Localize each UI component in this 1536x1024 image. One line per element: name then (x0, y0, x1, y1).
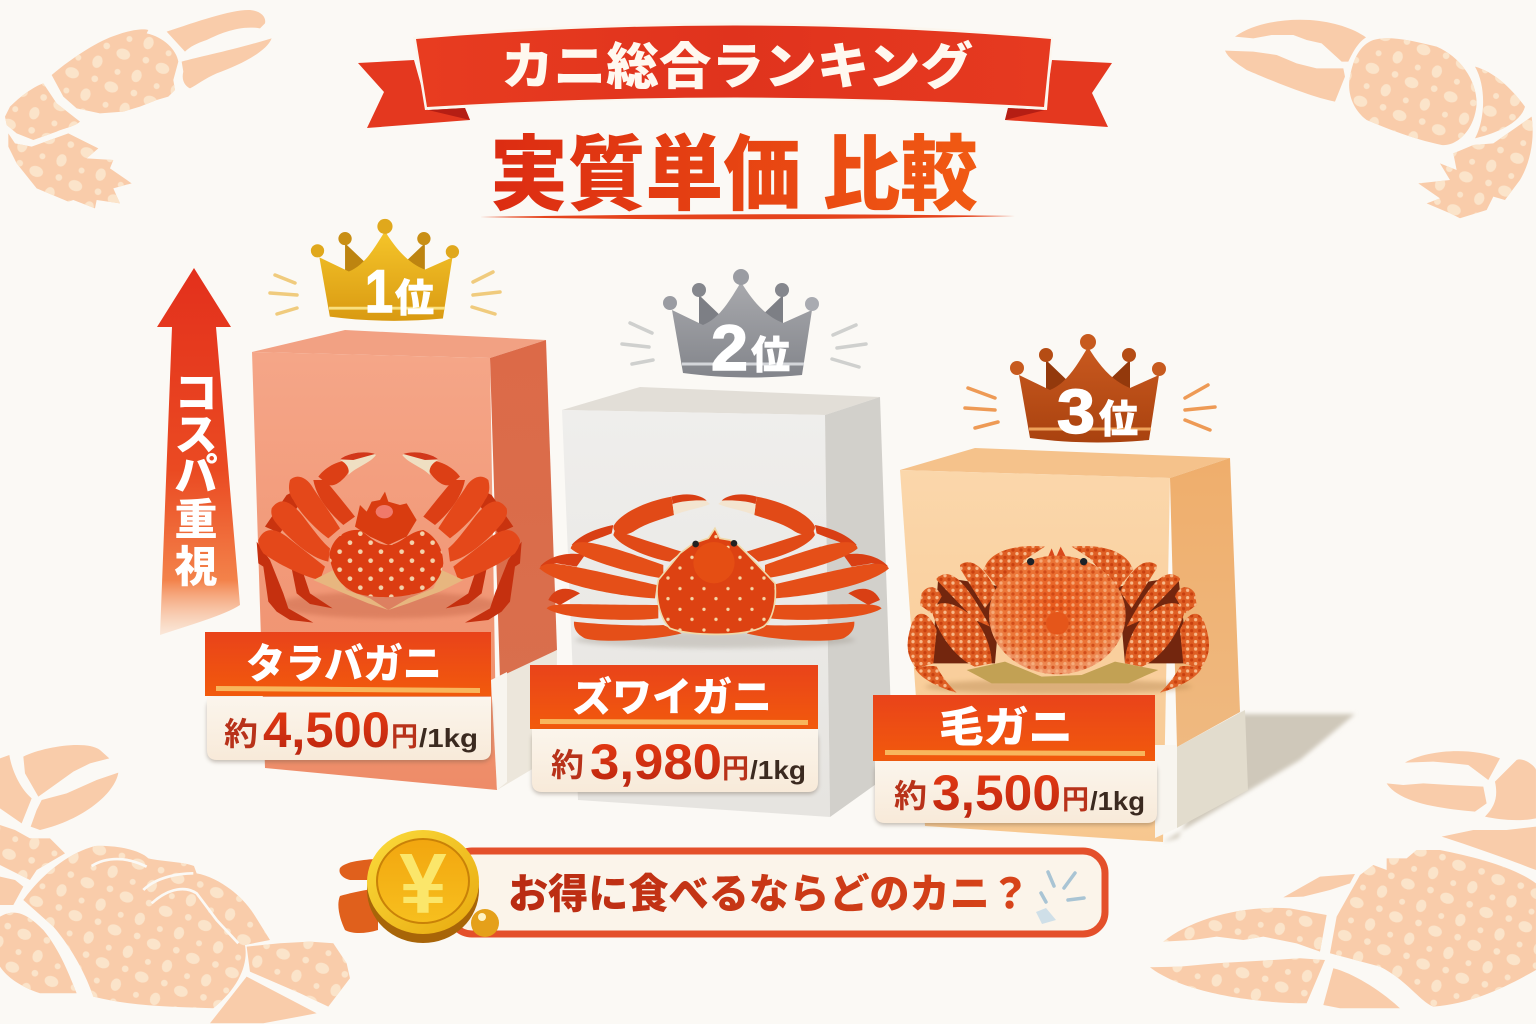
decoration: crab claw top left (5, 10, 272, 208)
arrow vertical text: 視 (174, 544, 218, 592)
rank label 3: 3 (1057, 378, 1095, 447)
name plate 2: ズワイガニ (572, 675, 772, 720)
crown: silver 2nd: 位 (751, 335, 790, 378)
crown: gold 1st: 位 (395, 278, 434, 321)
name plate 1: タラバガニ (246, 641, 442, 687)
ribbon right tail (1005, 60, 1112, 127)
price 3 (875, 761, 1157, 825)
price 2 (532, 729, 818, 794)
yen glyph: ¥ (399, 837, 447, 932)
arrow: cost performance (157, 268, 240, 635)
snow crab body (657, 528, 775, 634)
crab: snow crab (539, 494, 889, 648)
ribbon left tail (358, 60, 470, 128)
price 3: 円 (1062, 785, 1089, 815)
title ribbon (358, 22, 1112, 128)
hair crab legs (908, 546, 1209, 693)
crown: gold 1st (311, 219, 459, 325)
question banner (450, 851, 1105, 934)
price 1: 約 (224, 716, 258, 752)
king crab right legs (402, 452, 522, 623)
price 3: 3,500 (932, 765, 1061, 821)
price 2: /1kg (750, 755, 806, 785)
banner frame (450, 851, 1105, 934)
ribbon heading: カニ総合ランキング (501, 39, 973, 95)
subtitle: 実質単価 比較 (490, 130, 978, 221)
crown: silver 2nd (663, 269, 819, 384)
coin ribbon (338, 859, 378, 933)
price 1: /1kg (419, 723, 478, 753)
question text: お得に食べるならどのカニ？ (508, 871, 1030, 917)
king crab left legs (257, 452, 376, 623)
decoration: crab claw bottom left (0, 745, 350, 1023)
podium 3 (900, 448, 1248, 842)
name plate 3: 毛ガニ (939, 704, 1073, 751)
ribbon band (413, 22, 1053, 110)
price 1: 円 (391, 722, 418, 752)
label card 1: タラバガニ (205, 632, 491, 762)
sparks: bronze crown (965, 385, 1215, 430)
sparks: silver crown (622, 323, 866, 367)
king crab body (313, 492, 463, 610)
arrow vertical text (174, 370, 218, 592)
podium 3 shadow (1163, 714, 1355, 842)
crab: king crab (257, 452, 522, 623)
price 3: /1kg (1090, 786, 1145, 816)
crab: hair crab (908, 546, 1209, 694)
price 3: 約 (894, 778, 927, 814)
price 2: 3,980 (590, 734, 722, 790)
price 2: 約 (551, 747, 584, 783)
arrow vertical text: コ (174, 370, 218, 418)
crown: bronze 3rd (1010, 334, 1166, 447)
price 1: 4,500 (263, 702, 390, 758)
price 1 (207, 697, 491, 762)
arrow vertical text: パ (174, 452, 218, 500)
label card 2: ズワイガニ (530, 665, 818, 794)
name plate 3 (873, 695, 1155, 761)
sparkle marks (1036, 872, 1084, 924)
label card 3: 毛ガニ (873, 695, 1157, 825)
snow crab left legs (539, 494, 710, 641)
decoration: crab claw top right (1225, 20, 1533, 218)
decoration: crab claw bottom right (1150, 751, 1536, 1008)
sparks: gold crown (270, 272, 500, 314)
name plate 1 (205, 632, 491, 696)
icon: yen coin (338, 830, 499, 943)
price 2: 円 (722, 754, 749, 784)
hair crab body (967, 547, 1158, 683)
snow crab right legs (718, 494, 889, 641)
arrow vertical text: ス (174, 412, 218, 460)
crown: bronze 3rd: 位 (1099, 399, 1138, 442)
arrow vertical text: 重 (174, 497, 218, 545)
rank label 1: 1 (365, 258, 393, 325)
rank label 2: 2 (711, 312, 748, 384)
small coin (471, 909, 499, 937)
podium 2 (562, 387, 893, 817)
name plate 2 (530, 665, 818, 729)
podium 1 (252, 330, 557, 790)
